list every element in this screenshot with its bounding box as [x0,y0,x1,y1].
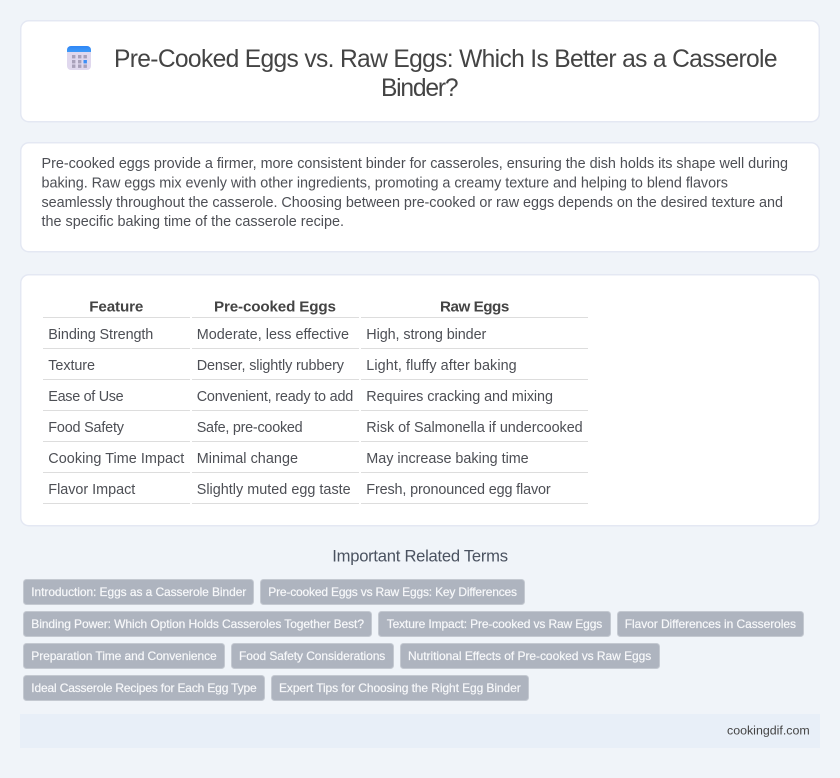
heading: important related terms: Important Related Terms [332,547,508,566]
tag: Preparation Time and Convenience [31,649,217,663]
tag [24,644,224,668]
table row: flavor impact: Fresh, pronounced egg flavor [366,482,551,498]
table row: flavor impact [48,482,551,498]
panel: header [21,21,819,122]
panel: introduction text: the specific baking time of the casserole recipe. [42,214,344,230]
tag: Flavor Differences in Casseroles [625,617,796,631]
panel: introduction text: Pre-cooked eggs provide a firmer, more consistent binder for casseroles, ensuring the dish holds its shape well during [42,156,788,172]
table row: ease of use: Convenient, ready to add [197,389,353,405]
tag [272,676,528,700]
table header row [89,298,509,316]
table row: food safety: Food Safety [48,420,125,436]
footer [20,714,820,748]
title: Binder? [381,75,458,102]
tag: Binding Power: Which Option Holds Casseroles Together Best? [31,617,364,631]
tag [24,676,264,700]
table row: cooking time impact: Minimal change [197,451,298,467]
tag: Expert Tips for Choosing the Right Egg Binder [279,681,521,695]
table row: food safety: Safe, pre-cooked [197,420,303,436]
title: Pre-Cooked Eggs vs. Raw Eggs: Which Is Better as a Casserole [114,46,778,73]
table header row: Raw Eggs [440,298,509,316]
tag: Introduction: Eggs as a Casserole Binder [31,585,246,599]
table row: texture [48,358,517,374]
table row: ease of use: Ease of Use [48,389,124,405]
tag [232,644,394,668]
tag [618,612,804,636]
title [114,46,778,102]
panel: introduction text [21,143,819,252]
table row: texture: Texture [48,358,95,374]
table row: cooking time impact: Cooking Time Impact [48,451,184,467]
tag: Food Safety Considerations [239,649,385,663]
table row: flavor impact: Slightly muted egg taste [197,482,351,498]
table row: flavor impact: Flavor Impact [48,482,135,498]
table row: texture: Denser, slightly rubbery [197,358,345,374]
tag: Nutritional Effects of Pre-cooked vs Raw Eggs [408,649,651,663]
tag: Pre-cooked Eggs vs Raw Eggs: Key Differences [268,585,517,599]
table row: binding strength: Binding Strength [48,327,153,343]
table row: food safety [48,420,583,436]
table row: cooking time impact: May increase baking time [366,451,529,467]
table row: binding strength: Moderate, less effective [197,327,349,343]
table header row: Feature [89,298,143,316]
panel: introduction text: baking. Raw eggs mix evenly with other ingredients, promoting a creamy texture and helping to blend flavors [42,175,728,191]
tag [400,644,660,668]
tag [24,580,254,604]
icon: calendar [67,46,91,70]
table row: texture: Light, fluffy after baking [366,358,517,374]
table row: ease of use [48,389,553,405]
table row: binding strength: High, strong binder [366,327,487,343]
table row: food safety: Risk of Salmonella if undercooked [366,420,583,436]
tag [24,612,372,636]
table row: ease of use: Requires cracking and mixing [366,389,553,405]
panel: comparison table [21,275,819,526]
tag: Ideal Casserole Recipes for Each Egg Type [31,681,257,695]
footer: cookingdif.com [727,724,810,738]
tag: Texture Impact: Pre-cooked vs Raw Eggs [387,617,602,631]
table header row: Pre-cooked Eggs [214,298,336,316]
tag [260,580,524,604]
panel: introduction text: seamlessly throughout the casserole. Choosing between pre-cooked or raw eggs depends on the desired texture and [42,195,783,211]
table row: cooking time impact [48,451,529,467]
related term tags [24,580,804,700]
table row: binding strength [48,327,487,343]
tag [378,612,610,636]
